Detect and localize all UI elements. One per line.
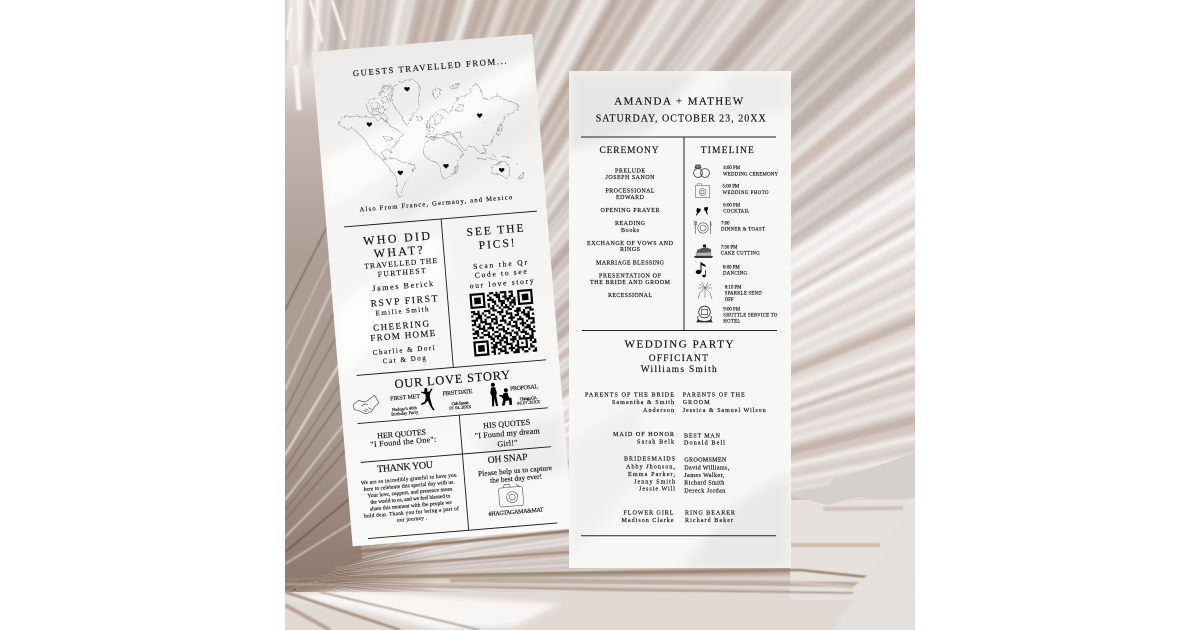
icon: dancing couple xyxy=(419,387,435,411)
panel: oh snap xyxy=(477,451,556,518)
icon: shuttle badge xyxy=(697,306,712,322)
panel: oh snap: Please help us to capture xyxy=(478,464,552,478)
panel: timeline: DINNER & TOAST xyxy=(721,228,765,233)
right card: program xyxy=(569,71,791,570)
panel: see the pics: SEE THE xyxy=(466,222,524,239)
caption: also from: Also From France, Germany, and Mexico xyxy=(359,194,513,214)
panel: who did what: TRAVELLED THE xyxy=(364,256,438,271)
panel: ceremony: Books xyxy=(621,228,640,234)
panel: wedding party: Jenny Smith xyxy=(634,479,675,485)
panel: oh snap: the best day ever! xyxy=(490,473,542,485)
australia xyxy=(491,161,510,179)
panel: timeline: 7:30 PM xyxy=(721,245,738,250)
panel: wedding party: Samantha & Smith xyxy=(612,400,674,406)
panel: oh snap: OH SNAP xyxy=(487,453,528,466)
panel: who did what: James Berick xyxy=(372,279,433,293)
map hearts xyxy=(367,87,504,175)
panel: our love story: 07. 04. 20XX xyxy=(449,404,472,411)
panel: our love story: OUR LOVE STORY xyxy=(394,368,511,391)
panel: his quotes xyxy=(474,417,542,450)
panel: wedding party: David Williams, xyxy=(684,465,730,471)
panel: timeline: 8:10 PM xyxy=(725,285,742,290)
panel: ceremony: PRELUDE xyxy=(615,169,645,175)
panel: thank you: THANK YOU xyxy=(377,460,434,475)
panel: wedding party xyxy=(585,338,766,524)
panel: ceremony: EXCHANGE OF VOWS AND xyxy=(587,241,674,247)
panel: ceremony: OPENING PRAYER xyxy=(600,208,660,214)
panel: who did what: CHEERING xyxy=(373,318,430,333)
european detail xyxy=(430,105,464,141)
icon: camera xyxy=(498,483,524,507)
panel: wedding party: OFFICIANT xyxy=(649,354,708,364)
panel: who did what: FROM HOME xyxy=(370,328,436,343)
panel: wedding party: Donald Bell xyxy=(684,441,725,447)
arctic islands xyxy=(367,84,393,140)
panel: our love story xyxy=(351,365,541,420)
panel: timeline: SPARKLE SEND xyxy=(725,292,762,297)
panel: wedding party: Dereck Jordan xyxy=(684,488,725,494)
panel: wedding party: BRIDESMAIDS xyxy=(624,457,676,463)
panel: timeline: HOTEL xyxy=(723,320,740,325)
panel: wedding party: Abby Jhonson, xyxy=(626,465,675,471)
heading: couple names and date: SATURDAY, OCTOBER 23, 20XX xyxy=(596,113,766,124)
panel: wedding party: Jessie Will xyxy=(639,487,675,493)
panel: who did what: FURTHEST xyxy=(377,266,426,279)
panel: wedding party: RING BEARER xyxy=(685,511,736,517)
panel: our love story: Chicago, GA xyxy=(520,395,538,402)
panel: ceremony: RECESSIONAL xyxy=(608,293,652,299)
panel: ceremony: READING xyxy=(615,221,646,227)
icon: rings xyxy=(694,165,709,177)
panel: ceremony xyxy=(587,146,674,299)
panel: his quotes: HIS QUOTES xyxy=(483,418,530,430)
panel: wedding party: Richard Smith xyxy=(684,481,724,487)
panel: her quotes xyxy=(369,427,437,449)
panel: timeline: TIMELINE xyxy=(701,146,754,156)
panel: ceremony: PRESENTATION OF xyxy=(599,274,662,280)
panel: thank you: our journey . xyxy=(397,515,427,524)
panel: our love story: Birthday Party xyxy=(391,409,419,417)
panel: see the pics: our love story xyxy=(469,276,534,290)
dividers xyxy=(341,211,562,539)
left card: guests travelled xyxy=(312,34,573,546)
panel: wedding party: PARENTS OF THE BRIDE xyxy=(585,393,674,399)
panel: timeline: 8:00 PM xyxy=(723,265,740,270)
icon: sparkler xyxy=(698,282,712,299)
panel: wedding party: GROOM xyxy=(683,400,710,406)
panel: oh snap: #HAGTAGAMA&MAT xyxy=(488,507,544,518)
QR code xyxy=(469,290,537,356)
panel: ceremony: PROCESSIONAL xyxy=(606,189,655,195)
panel: timeline: SHUTTLE SERVICE TO xyxy=(723,313,778,318)
panel: timeline: 7:00 xyxy=(721,221,730,226)
panel: our love story: Nadege's 40th xyxy=(392,405,418,412)
panel: thank you: the world to us, and we feel blessed to xyxy=(370,492,451,506)
panel: timeline xyxy=(694,146,779,325)
iceland and svalbard xyxy=(417,83,459,121)
panel: timeline: WEDDING PHOTO xyxy=(722,191,769,196)
icon: plate and cutlery xyxy=(694,221,711,234)
panel: timeline: 9:00 PM xyxy=(723,307,741,312)
panel: thank you: here to celebrate this special day with us. xyxy=(364,479,455,493)
panel: wedding party: Jessica & Samuel Wilson xyxy=(683,408,766,414)
panel: timeline: WEDDING CEREMONY xyxy=(723,173,779,178)
panel: ceremony: RINGS xyxy=(620,247,640,253)
madagascar xyxy=(455,166,459,173)
panel: timeline: CAKE CUTTING xyxy=(721,252,760,257)
icon: handshake xyxy=(352,395,380,415)
panel: see the pics: Scan the Qr xyxy=(473,258,528,271)
panel: wedding party: FLOWER GIRL xyxy=(624,511,674,517)
panel: wedding party: BEST MAN xyxy=(684,433,721,439)
panel: ceremony: THE BRIDE AND GROOM xyxy=(590,280,671,286)
panel: timeline: DANCING xyxy=(723,272,748,277)
panel: who did what: Charlie & Dori xyxy=(373,344,435,357)
panel: wedding party: Anderson xyxy=(643,408,674,414)
panel: timeline: COCKTAIL xyxy=(723,210,749,215)
panel: her quotes: HER QUOTES xyxy=(377,428,426,441)
panel: who did what: WHO DID xyxy=(363,229,431,248)
panel: wedding party: Richard Baker xyxy=(685,518,733,524)
dividers xyxy=(581,137,777,536)
north america xyxy=(338,115,403,159)
panel: his quotes: Girl!" xyxy=(497,438,518,449)
panel: wedding party: Madison Clarke xyxy=(622,518,674,524)
icon: photo camera xyxy=(696,184,710,198)
icon: music notes xyxy=(696,262,706,277)
panel: who did what: WHAT? xyxy=(373,243,423,261)
panel: timeline: 5:00 PM xyxy=(722,185,740,190)
icon: cake xyxy=(694,244,713,258)
panel: who did what: RSVP FIRST xyxy=(370,294,438,310)
panel: thank you: We are so incredibly grateful to have you xyxy=(361,472,457,486)
panel: thank you: hold dear. Thank you for being a part of xyxy=(364,505,459,520)
heading: couple names and date xyxy=(596,95,766,124)
panel: our love story: Cafe Sasuta xyxy=(451,400,469,406)
panel: wedding party: GROOMSMEN xyxy=(684,457,727,463)
panel: wedding party: Sarah Belk xyxy=(637,440,675,446)
map coastlines xyxy=(338,80,524,197)
panel: wedding party: MAID OF HONOR xyxy=(613,432,675,438)
icon: proposal silhouette xyxy=(489,381,512,406)
panel: ceremony: CEREMONY xyxy=(600,146,659,156)
panel: our love story: PROPOSAL xyxy=(510,384,539,392)
world map xyxy=(338,80,524,197)
panel: thank you xyxy=(359,458,460,526)
panel: his quotes: "I Found my dream xyxy=(475,426,541,441)
panel: wedding party: WEDDING PARTY xyxy=(624,338,734,350)
panel: our love story: 06.07.20XX xyxy=(517,399,541,406)
panel: timeline: OFF xyxy=(725,298,734,303)
background photo: dried palm fan xyxy=(285,0,915,630)
heading: couple names and date: AMANDA + MATHEW xyxy=(614,95,744,107)
panel: wedding party: PARENTS OF THE xyxy=(683,393,745,399)
panel: who did what xyxy=(362,228,446,366)
greenland xyxy=(392,80,420,125)
icon: champagne glasses xyxy=(696,207,708,216)
panel: timeline: 6:00 PM xyxy=(723,203,741,208)
panel: wedding party: Emma Parker, xyxy=(628,472,675,478)
panel: see the pics: PICS! xyxy=(478,237,515,252)
left card paper xyxy=(312,34,573,546)
panel: timeline: 4:00 PM xyxy=(723,166,741,171)
panel: see the pics: Code to see xyxy=(474,267,528,280)
south america xyxy=(383,158,415,197)
panel: ceremony: EDWARD xyxy=(616,195,645,201)
panel: thank you: Your love, support, and presence mean xyxy=(367,486,453,499)
panel: see the pics xyxy=(464,222,539,356)
panel: wedding party: James Walker, xyxy=(684,473,725,479)
eurasia xyxy=(425,84,519,154)
panel: our love story: FIRST MET xyxy=(390,394,421,402)
panel: wedding party: Williams Smith xyxy=(641,365,717,375)
panel: her quotes: "I Found the One": xyxy=(370,435,437,449)
panel: who did what: Emilie Smith xyxy=(375,305,429,317)
africa xyxy=(423,137,464,179)
right card paper xyxy=(569,71,791,568)
title: guests travelled from: GUESTS TRAVELLED FROM... xyxy=(352,56,507,78)
panel: our love story: FIRST DATE xyxy=(442,389,473,397)
uk, japan, islands xyxy=(427,123,524,179)
panel: thank you: share this moment with the people we xyxy=(370,500,453,513)
panel: ceremony: JOSEPH SANON xyxy=(606,175,655,181)
panel: who did what: Cat & Dog xyxy=(383,354,427,365)
panel: ceremony: MARRIAGE BLESSING xyxy=(596,261,665,267)
